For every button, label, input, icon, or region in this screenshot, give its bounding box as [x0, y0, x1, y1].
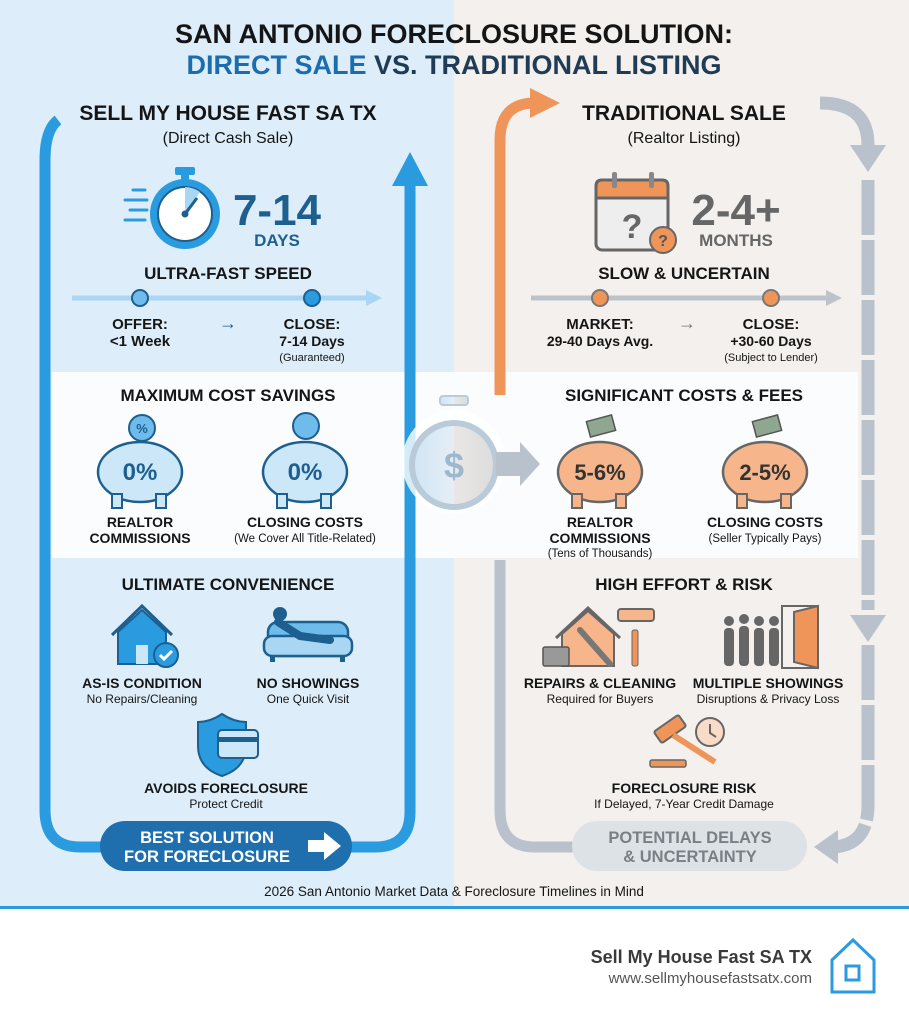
heading: significant costs: SIGNIFICANT COSTS & FEES	[565, 386, 803, 405]
icon: piggy 2-5%: 2-5%	[739, 460, 791, 485]
right header	[582, 102, 786, 147]
labels: savings: REALTOR	[107, 514, 173, 530]
icon: repairs	[543, 608, 654, 666]
labels: costs: REALTOR	[567, 514, 633, 530]
labels: convenience: One Quick Visit	[267, 692, 350, 706]
button: potential delays: POTENTIAL DELAYS	[608, 829, 772, 847]
labels: avoids foreclosure: AVOIDS FORECLOSURE	[144, 780, 308, 796]
button: potential delays	[572, 821, 807, 871]
icon: people at door	[724, 606, 818, 668]
left header: SELL MY HOUSE FAST SA TX	[79, 102, 377, 125]
footer brand: Sell My House Fast SA TX	[591, 947, 812, 967]
heading: maximum cost savings: MAXIMUM COST SAVINGS	[120, 386, 336, 405]
labels: savings	[89, 514, 376, 546]
footer brand: www.sellmyhousefastsatx.com	[608, 970, 812, 987]
labels: convenience	[82, 675, 359, 706]
labels: convenience: AS-IS CONDITION	[82, 675, 202, 691]
labels: foreclosure risk: FORECLOSURE RISK	[612, 780, 756, 796]
labels: effort: Disruptions & Privacy Loss	[697, 692, 839, 706]
icon: couch person	[264, 607, 352, 662]
icon: piggy 5-6%: 5-6%	[574, 460, 626, 485]
labels: savings: COMMISSIONS	[89, 530, 191, 546]
icon: piggy 0% commissions: %	[136, 421, 148, 436]
timeline left: OFFER:	[112, 316, 168, 333]
big number: 2-4+ months: 2-4+	[691, 186, 781, 235]
icon: shield card	[198, 714, 258, 776]
labels: costs: CLOSING COSTS	[707, 514, 823, 530]
labels: costs	[548, 514, 823, 560]
icon: piggy 2-5%	[723, 415, 807, 508]
labels: effort: Required for Buyers	[547, 692, 653, 706]
icon: stopwatch	[125, 167, 220, 249]
timeline right: CLOSE:	[743, 316, 799, 333]
right header: TRADITIONAL SALE	[582, 102, 786, 125]
labels: savings: CLOSING COSTS	[247, 514, 363, 530]
icon: footer house	[832, 940, 874, 992]
labels: effort: REPAIRS & CLEANING	[524, 675, 676, 691]
arrow: left blue loop	[45, 120, 428, 847]
timeline right: (Subject to Lender)	[724, 352, 818, 364]
title	[175, 19, 733, 80]
icon: piggy 0% closing: 0%	[288, 459, 322, 486]
labels: convenience: No Repairs/Cleaning	[87, 692, 197, 706]
icon: gavel clock	[650, 715, 724, 767]
labels: costs: (Seller Typically Pays)	[709, 533, 822, 545]
title: SAN ANTONIO FORECLOSURE SOLUTION:	[175, 19, 733, 49]
labels: convenience: NO SHOWINGS	[257, 675, 359, 691]
timeline left: →	[219, 313, 237, 333]
labels: costs: (Tens of Thousands)	[548, 548, 652, 560]
right header: (Realtor Listing)	[628, 130, 740, 147]
title: DIRECT SALE VS. TRADITIONAL LISTING	[186, 50, 722, 80]
timeline left	[72, 290, 382, 364]
icon: piggy 0% commissions	[98, 415, 182, 508]
left header: (Direct Cash Sale)	[163, 130, 293, 147]
icon: piggy 5-6%	[558, 415, 642, 508]
timeline left: <1 Week	[110, 333, 171, 350]
timeline left: (Guaranteed)	[279, 352, 345, 364]
big number: 7-14 days: DAYS	[254, 231, 300, 250]
arrow: right orange and gray loops	[500, 88, 886, 864]
timeline right: +30-60 Days	[730, 333, 812, 349]
timeline right	[531, 290, 842, 364]
button: best solution: FOR FORECLOSURE	[124, 848, 290, 866]
icon: calendar: ?	[658, 233, 668, 250]
heading: ultra-fast speed: ULTRA-FAST SPEED	[144, 264, 312, 283]
icon: center stopwatch dollar	[402, 396, 540, 514]
icon: piggy 0% closing	[263, 413, 347, 508]
left header	[79, 102, 377, 147]
timeline left: CLOSE:	[284, 316, 340, 333]
timeline right: MARKET:	[566, 316, 634, 333]
button: best solution: BEST SOLUTION	[140, 829, 274, 847]
button: potential delays: & UNCERTAINTY	[623, 848, 757, 866]
button: best solution	[100, 821, 352, 871]
labels: foreclosure risk: If Delayed, 7-Year Credit Damage	[594, 797, 774, 811]
heading: high effort: HIGH EFFORT & RISK	[595, 575, 773, 594]
icon: calendar: ?	[622, 208, 642, 246]
heading: ultimate convenience: ULTIMATE CONVENIENCE	[122, 575, 334, 594]
labels: effort	[524, 675, 843, 706]
labels: savings: (We Cover All Title-Related)	[234, 533, 376, 545]
labels: avoids foreclosure: Protect Credit	[189, 797, 263, 811]
footer brand	[591, 947, 812, 987]
labels: foreclosure risk	[594, 780, 774, 811]
icon: house check	[112, 606, 178, 667]
caption: 2026 San Antonio Market Data & Foreclosure Timelines in Mind	[264, 884, 644, 899]
labels: effort: MULTIPLE SHOWINGS	[693, 675, 843, 691]
icon: center stopwatch dollar: $	[444, 445, 464, 486]
labels: costs: COMMISSIONS	[549, 530, 651, 546]
timeline left: 7-14 Days	[279, 333, 345, 349]
icon: calendar	[596, 172, 676, 253]
big number: 2-4+ months: MONTHS	[699, 231, 773, 250]
timeline right: 29-40 Days Avg.	[547, 333, 653, 349]
labels: avoids foreclosure	[144, 780, 308, 811]
big number: 7-14 days: 7-14	[233, 186, 322, 235]
heading: slow & uncertain: SLOW & UNCERTAIN	[598, 264, 770, 283]
icon: piggy 0% commissions: 0%	[123, 459, 157, 486]
timeline right: →	[678, 313, 696, 333]
